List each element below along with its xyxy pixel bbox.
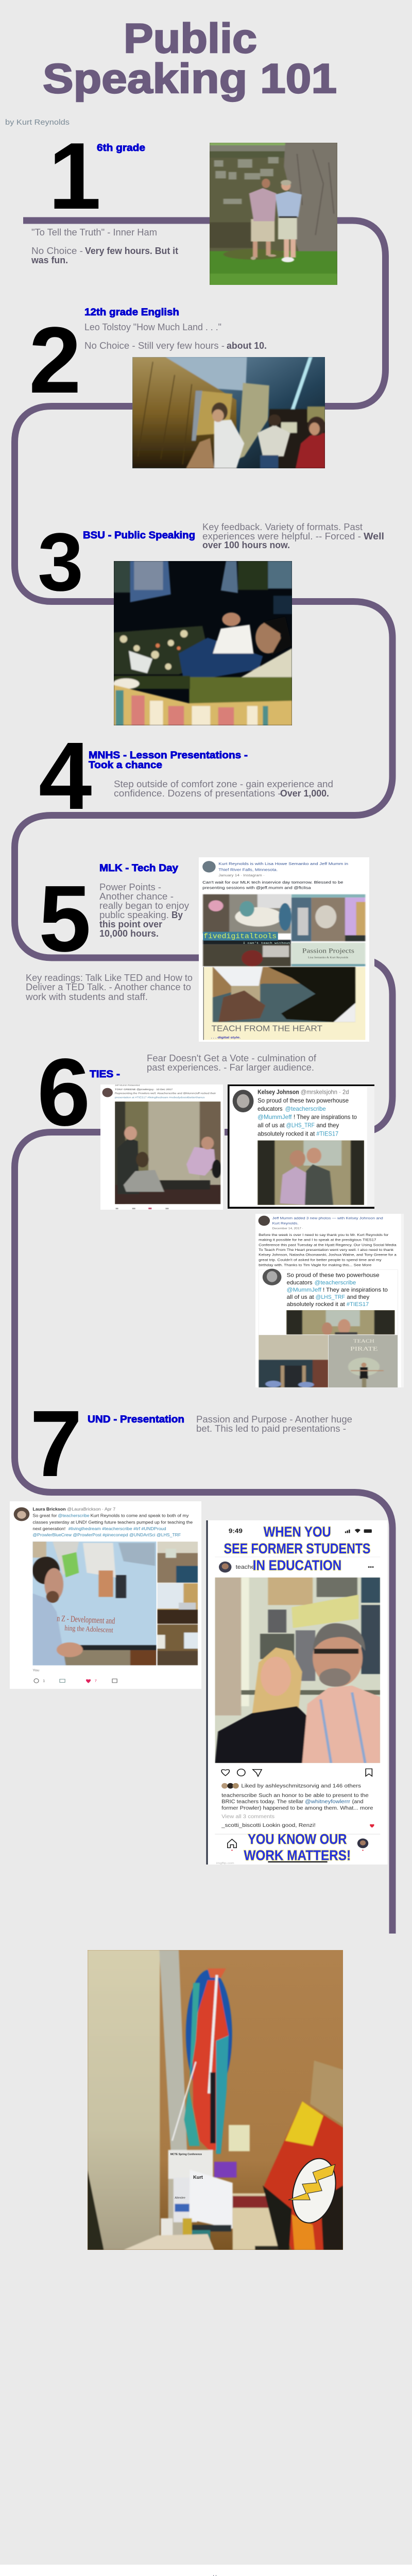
screenshot: Instagram post meme: @whitneyfowlerrr — [305, 1799, 351, 1805]
text: passion and purpose: bet. This led to paid presentations - — [196, 1423, 346, 1434]
text: power points: By — [171, 909, 183, 920]
footer band — [0, 2565, 412, 2576]
step 2 — [29, 307, 325, 468]
screenshot: Tony Greene tweet — [100, 1084, 223, 1210]
screenshot: Jeff Mumm facebook post: making it possible for he and I to speak at the prestigious TIES17 — [259, 1239, 376, 1242]
screenshot: Tony Greene tweet: Representing the Prowlers well. #teacherscribe and @MummJeff rocked their — [115, 1092, 216, 1095]
post photo: teacher and former student — [215, 1578, 380, 1763]
screenshot: Laura Brickson tweet: @teacherscribe — [58, 1513, 90, 1518]
screenshot: Laura Brickson tweet: Kurt Reynolds to come and speak to both of my — [91, 1513, 189, 1518]
text: power points: really began to enjoy — [99, 900, 190, 911]
step 7 — [10, 1391, 387, 1865]
photo: lanyards on cork board: MCTE Spring Conference — [170, 2153, 202, 2156]
screenshot: Jeff Mumm facebook post: #TIES17 — [347, 1302, 369, 1308]
screenshot: Kelsey Johnson tweet: @MummJeff — [258, 1114, 292, 1121]
screenshot: Kelsey Johnson tweet: Kelsey Johnson — [258, 1089, 299, 1096]
screenshot: Instagram post meme: ••• — [368, 1564, 374, 1570]
screenshot: Instagram post meme: 9:49 — [229, 1528, 243, 1534]
screenshot: Laura Brickson tweet: @ProwlerBlueCrew @ProwlerPost #pineconepd @UNDArtSci @LHS_TRF — [32, 1533, 181, 1537]
screenshot: facebook post with collage: Kurt Reynolds is with Lisa Howe Semanko and Jeff Mumm in — [218, 862, 348, 866]
screenshot: Jeff Mumm facebook post: To Teach From The Heart presentation went very well. I also need to thank — [259, 1248, 394, 1252]
text: power points: this point over — [99, 919, 162, 929]
screenshot: Instagram post meme: View all 3 comments — [221, 1814, 274, 1820]
heading: UND presentation: UND - Presentation — [88, 1414, 184, 1425]
number 2: 2 — [29, 307, 81, 413]
number 4: 4 — [39, 723, 92, 829]
text: Leo Tolstoy: about 10. — [227, 340, 267, 351]
screenshot: Jeff Mumm facebook post: PIRATE — [350, 1345, 378, 1352]
number 5: 5 — [39, 866, 91, 971]
text: key feedback: Well — [364, 531, 384, 541]
screenshot: Jeff Mumm facebook post: TEACH — [353, 1339, 374, 1344]
title: Speaking 101 — [43, 56, 337, 102]
screenshot: facebook post with collage: Lisa Semanko & Kurt Reynolds — [308, 956, 348, 959]
text: key readings — [25, 972, 193, 1002]
screenshot: Jeff Mumm facebook post: Jeff Mumm added 3 new photos — with Kelsey Johnson and — [272, 1217, 383, 1221]
screenshot: facebook post with collage: . . . digital style. — [211, 1037, 241, 1040]
title: Public — [124, 15, 257, 62]
screenshot: Kelsey Johnson tweet — [228, 1084, 374, 1209]
screenshot: Jeff Mumm facebook post: educators — [287, 1280, 313, 1286]
screenshot: Kelsey Johnson tweet: @mrskelsjohn · 2d — [301, 1089, 349, 1096]
photo: lanyards on cork board: Kurt — [193, 2175, 203, 2180]
screenshot: Instagram post meme: Liked by ashleyschmitzsorvig and 146 others — [241, 1783, 361, 1789]
step 5 — [25, 857, 369, 1042]
screenshot: Laura Brickson tweet: @LauraBrickson · Apr 7 — [67, 1506, 115, 1512]
screenshot: facebook post with collage: Thief River Falls, Minnesota. — [218, 868, 278, 872]
meme caption text: IN EDUCATION — [253, 1557, 341, 1573]
screenshot: Jeff Mumm facebook post: December 14, 2017 · — [272, 1227, 303, 1230]
screenshot: facebook post with collage: presenting sessions with @jeff.mumm and @ftclisa — [202, 886, 311, 890]
photo: two men by a tree — [210, 143, 337, 285]
screenshot: Kelsey Johnson tweet: @teacherscribe — [285, 1106, 326, 1112]
screenshot: Jeff Mumm facebook post: Kurt Reynolds. — [272, 1222, 299, 1225]
text: to tell the truth: was fun. — [31, 255, 68, 265]
photo: lanyards on cork board: Attendee — [175, 2196, 185, 2199]
screenshot: Laura Brickson tweet — [10, 1501, 201, 1689]
text: key readings: Deliver a TED Talk. - Another chance to — [26, 981, 191, 992]
screenshot: Jeff Mumm facebook post — [255, 1214, 404, 1387]
screenshot: Instagram post meme — [206, 1520, 387, 1865]
meme caption text: WHEN YOU — [264, 1524, 331, 1540]
screenshot: Jeff Mumm facebook post: Before the week is over I need to say thank you to Mr. Kurt Reynolds for — [259, 1233, 389, 1237]
meme caption text — [224, 1524, 370, 1863]
screenshot: Laura Brickson tweet: Laura Brickson — [32, 1506, 66, 1512]
screenshot: Jeff Mumm facebook post: So proud of these two powerhouse — [287, 1273, 380, 1279]
text: to tell the truth: "To Tell the Truth" - Inner Ham — [31, 227, 157, 238]
screenshot: Laura Brickson tweet: You — [32, 1669, 39, 1672]
screenshot: Kelsey Johnson tweet: absolutely rocked it at — [258, 1130, 315, 1137]
step 1 — [31, 123, 337, 285]
text: step outside comfort zone: Over 1,000. — [280, 788, 329, 799]
screenshot: Kelsey Johnson tweet: ! They are inspirations to — [294, 1114, 357, 1121]
photo: lanyards on cork board — [88, 1950, 343, 2250]
text: key feedback: experiences were helpful. -- Forced - — [202, 531, 361, 541]
screenshot: Laura Brickson tweet: So great for — [32, 1513, 57, 1518]
screenshot: Kelsey Johnson tweet: all of us at — [258, 1122, 285, 1129]
text: to tell the truth: Very few hours. But it — [85, 245, 178, 256]
heading: BSU public speaking: BSU - Public Speaking — [83, 530, 195, 541]
heading: MNHS lesson presentations: Took a chance — [89, 760, 162, 771]
screenshot: Instagram post meme: teache — [236, 1565, 254, 1570]
screenshot: Tony Greene tweet: Jeff Mumm Retweeted — [115, 1084, 140, 1087]
text: power points: public speaking. — [99, 909, 169, 920]
text: passion and purpose: Passion and Purpose - Another huge — [196, 1414, 352, 1425]
screenshot: Jeff Mumm facebook post: all of us at — [287, 1295, 314, 1300]
screenshot: Jeff Mumm facebook post: Conference this past Tuesday at the Hyatt Regency. Our Using Social Media — [259, 1244, 397, 1247]
number 1: 1 — [48, 123, 101, 229]
step 6 — [37, 1039, 404, 1387]
screenshot: Jeff Mumm facebook post: @teacherscribe — [315, 1280, 356, 1286]
screenshot: facebook post with collage: Can't wait for our MLK tech inservice day tomorrow. Blessed to be — [202, 880, 344, 885]
text: step outside comfort zone: Step outside of comfort zone - gain experience and — [114, 778, 333, 789]
byline: by Kurt Reynolds — [5, 118, 70, 127]
text: Leo Tolstoy: Leo Tolstoy "How Much Land . . ." — [84, 321, 221, 332]
text: key readings: work with students and staff. — [25, 991, 148, 1002]
screenshot: Jeff Mumm facebook post: and they — [347, 1295, 369, 1300]
text: Leo Tolstoy — [84, 321, 267, 351]
meme caption text: YOU KNOW OUR — [248, 1832, 347, 1847]
screenshot: Tony Greene tweet: TONY GREENE @prowlerguy · 10 Dec 2017 — [115, 1088, 173, 1091]
text: fear doesn't get a vote — [147, 1053, 317, 1073]
screenshot: Laura Brickson tweet: hing the Adolescent — [64, 1624, 114, 1634]
text: Leo Tolstoy: No Choice - Still very few hours - — [84, 340, 225, 351]
screenshot: Laura Brickson tweet: next generation! — [32, 1526, 65, 1531]
screenshot: facebook post with collage: I can't teach without — [243, 941, 290, 945]
text: step outside comfort zone: confidence. Dozens of presentations - — [114, 788, 281, 799]
screenshot: Laura Brickson tweet: n Z - Development and — [57, 1614, 115, 1625]
screenshot: Kelsey Johnson tweet: #TIES17 — [316, 1130, 338, 1137]
screenshot: Jeff Mumm facebook post: @MummJeff — [287, 1287, 322, 1293]
number 3: 3 — [38, 516, 83, 608]
photo: school hallway lockers — [132, 357, 325, 468]
screenshot: Kelsey Johnson tweet: and they — [316, 1122, 339, 1129]
text: key feedback — [202, 521, 384, 550]
text: fear doesn't get a vote: Fear Doesn't Get a Vote - culmination of — [147, 1053, 317, 1063]
text: power points: Another chance - — [99, 891, 174, 902]
step 4 — [39, 723, 333, 829]
heading: 6th grade: 6th grade — [97, 143, 145, 154]
screenshot: Jeff Mumm facebook post: absolutely rocked it at — [287, 1302, 346, 1308]
screenshot: Jeff Mumm facebook post: ! They are inspirations to — [323, 1287, 388, 1293]
timeline path — [14, 221, 392, 1934]
screenshot: Jeff Mumm facebook post: birthday with. Thanks to Tim Vagle for making this... See More — [259, 1264, 372, 1267]
screenshot: Instagram post meme: (and — [352, 1799, 364, 1805]
text: fear doesn't get a vote: past experiences. - Far larger audience. — [147, 1062, 314, 1073]
number 6: 6 — [37, 1039, 90, 1146]
screenshot: Laura Brickson tweet: classes yesterday at UND! Getting future teachers pumped up for teaching the — [32, 1520, 193, 1524]
text: power points: Power Points - — [99, 882, 161, 892]
screenshot: facebook post with collage: TEACH FROM THE HEART — [212, 1024, 323, 1033]
screenshot: Instagram post meme: former Prowler) happened to be among them. What... more — [221, 1805, 373, 1811]
text: to tell the truth — [31, 227, 178, 265]
text: key feedback: over 100 hours now. — [202, 539, 290, 550]
text: key readings: Key readings: Talk Like TED and How to — [26, 972, 193, 983]
text: power points — [99, 882, 190, 939]
heading: 12th grade English: 12th grade English — [84, 307, 179, 318]
screenshot: Instagram post meme: teacherscribe Such an honor to be able to present to the — [221, 1793, 369, 1799]
screenshot: Kelsey Johnson tweet: So proud of these two powerhouse — [258, 1097, 349, 1104]
text: passion and purpose — [196, 1414, 352, 1434]
screenshot: Jeff Mumm facebook post: great trip. Couldn't of asked for better people to spend time and my — [259, 1259, 382, 1262]
meme caption text: WORK MATTERS! — [244, 1848, 351, 1863]
screenshot: Jeff Mumm facebook post: Kelsey Johnson, Natasha Olsonawski, Joshua Watne, and Tony Greene for a — [259, 1253, 397, 1257]
screenshot: Instagram post meme: BRIC teachers today. The stellar — [221, 1799, 304, 1805]
text: step outside comfort zone — [114, 778, 333, 799]
text: key feedback: Key feedback. Variety of formats. Past — [202, 521, 363, 532]
heading: MLK tech day: MLK - Tech Day — [99, 863, 178, 874]
screenshot: Laura Brickson tweet: 1 — [43, 1680, 45, 1683]
step 3 — [38, 516, 384, 725]
text: to tell the truth: No Choice - — [31, 245, 83, 256]
number 7: 7 — [30, 1391, 82, 1496]
screenshot: Jeff Mumm facebook post: @LHS_TRF — [316, 1295, 345, 1300]
screenshot: Kelsey Johnson tweet: @LHS_TRF — [286, 1122, 315, 1129]
heading: TIES: TIES - — [90, 1069, 120, 1080]
screenshot: Tony Greene tweet: presentation at #TIES17 #livingthedream #nobodydoesitbetterthanus — [115, 1096, 205, 1099]
screenshot: Instagram post meme: imgflip.com — [216, 1861, 234, 1865]
screenshot: facebook post with collage: January 14 · Instagram · — [218, 874, 265, 877]
screenshot: Kelsey Johnson tweet: educators — [258, 1106, 283, 1112]
screenshot: Laura Brickson tweet: #livingthedream #teacherscribe #trf #UNDProud — [68, 1526, 166, 1531]
heading: MNHS lesson presentations — [89, 750, 248, 771]
screenshot: Laura Brickson tweet: 7 — [95, 1680, 97, 1683]
text: power points: 10,000 hours. — [99, 928, 159, 939]
screenshot: Instagram post meme: _scotti_biscotti Lookin good, Renzi! — [221, 1823, 316, 1828]
screenshot: facebook post with collage: fivedigitaltools — [203, 933, 277, 941]
screenshot: facebook post with collage — [199, 857, 369, 1042]
screenshot: facebook post with collage: Passion Projects — [302, 947, 354, 954]
heading: MNHS lesson presentations: MNHS - Lesson Presentations - — [89, 750, 248, 761]
title — [43, 15, 337, 102]
photo: person on couch with cat — [114, 561, 292, 725]
